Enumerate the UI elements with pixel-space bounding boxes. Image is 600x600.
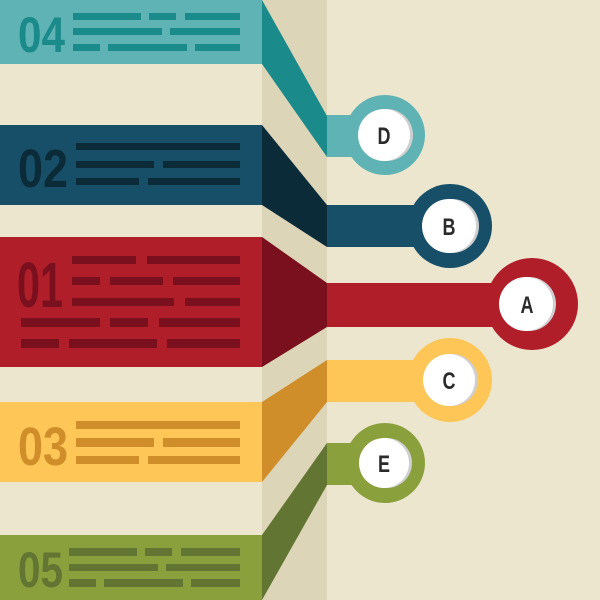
- step 03 band with connector C: [0, 338, 492, 482]
- step 02 band with connector B: 02: [18, 139, 68, 199]
- step 02 band with connector B: B: [442, 214, 456, 241]
- step 02 band with connector B: [0, 125, 492, 268]
- step 05 band with connector E: E: [378, 451, 390, 478]
- step 05 band with connector E: [0, 423, 425, 600]
- step 03 band with connector C: C: [442, 368, 456, 395]
- step 04 band with connector D: D: [378, 123, 390, 150]
- step 03 band with connector C: 03: [18, 417, 68, 477]
- step 01 band with connector A: A: [520, 292, 534, 319]
- step 04 band with connector D: [0, 0, 425, 175]
- step 04 band with connector D: 04: [18, 7, 65, 63]
- step 01 band with connector A: [0, 237, 578, 367]
- step 05 band with connector E: 05: [18, 542, 63, 598]
- step 01 band with connector A: 01: [17, 249, 63, 321]
